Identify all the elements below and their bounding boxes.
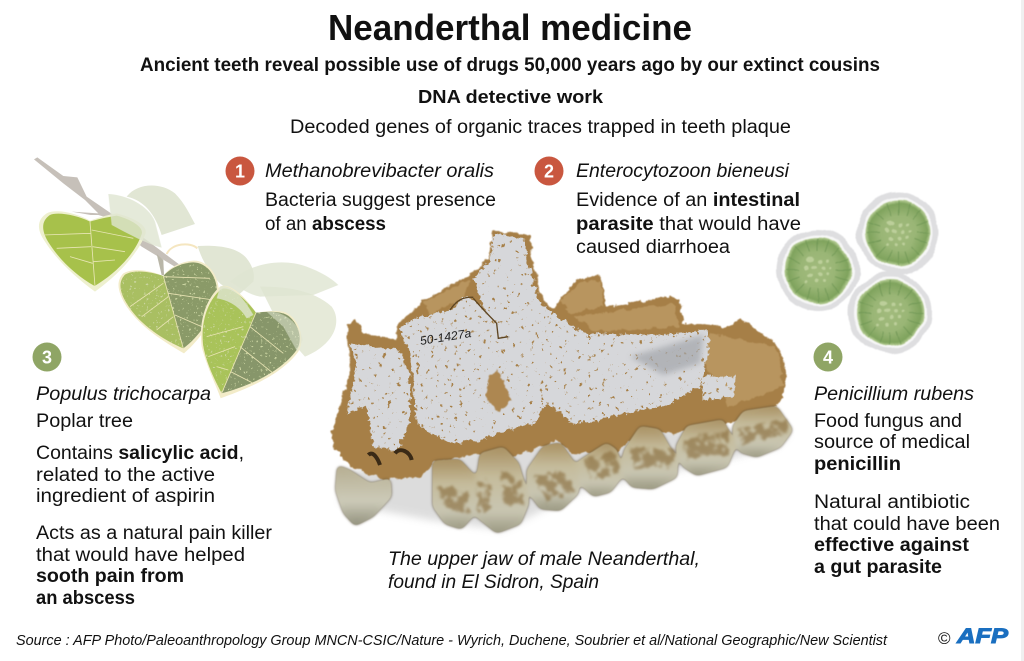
tooth staining [437, 420, 788, 513]
description: Natural antibiotic [814, 492, 970, 513]
description [36, 411, 273, 609]
description: caused diarrhoea [576, 237, 730, 258]
badge 3: 3 [42, 348, 52, 368]
description [265, 190, 496, 235]
leaf 3 [201, 286, 301, 398]
item 4: Penicillium rubens [814, 342, 1000, 578]
description: source of medical [814, 432, 970, 453]
description: related to the active [36, 465, 215, 486]
species name: Penicillium rubens [814, 384, 975, 405]
bone base [332, 230, 787, 480]
AFP credit: AFP [956, 625, 1009, 648]
leaf 2 [118, 261, 219, 353]
description: Bacteria suggest presence [265, 190, 496, 211]
ghost leaves [127, 186, 336, 357]
badge 2 [534, 156, 564, 186]
description: of an abscess [265, 214, 386, 235]
species name: Methanobrevibacter oralis [265, 161, 495, 182]
source line: Source : AFP Photo/Paleoanthropology Group MNCN-CSIC/Nature - Wyrich, Duchene, Soubrier et al/National Geographic/New Scientist [16, 632, 888, 649]
description [814, 411, 1000, 578]
darker shaded area [630, 335, 703, 375]
photo caption [388, 549, 700, 593]
section intro: Decoded genes of organic traces trapped in teeth plaque [290, 117, 791, 138]
cracks [450, 297, 508, 338]
illustration: penicillium colonies [777, 192, 939, 354]
item 2: Enterocytozoon bieneusi [534, 156, 801, 258]
bone highlights [423, 280, 783, 407]
photo caption: The upper jaw of male Neanderthal, [388, 549, 700, 570]
description: penicillin [814, 454, 901, 475]
description: an abscess [36, 588, 135, 609]
description [576, 190, 801, 258]
description: that could have been [814, 514, 1000, 535]
description: Contains salicylic acid, [36, 443, 244, 464]
badge 1: 1 [235, 162, 245, 182]
item 3: Populus trichocarpa [32, 342, 273, 609]
leaf 1 [39, 211, 146, 292]
description: that would have helped [36, 545, 245, 566]
AFP credit [938, 625, 1009, 648]
description: Evidence of an intestinal [576, 190, 800, 211]
catalogue number: 50-1427a [419, 326, 472, 348]
description: Poplar tree [36, 411, 133, 432]
title: Neanderthal medicine [328, 7, 692, 48]
illustration: poplar leaves [34, 157, 338, 398]
description: ingredient of aspirin [36, 486, 215, 507]
badge 4: 4 [823, 348, 833, 368]
item 1: Methanobrevibacter oralis [226, 156, 496, 235]
tan patch [487, 370, 512, 412]
subtitle: Ancient teeth reveal possible use of drugs 50,000 years ago by our extinct cousins [140, 55, 880, 76]
branch [34, 157, 180, 267]
badge 2: 2 [544, 162, 554, 182]
species name: Enterocytozoon bieneusi [576, 161, 790, 182]
description: parasite that would have [576, 214, 801, 235]
description: sooth pain from [36, 566, 184, 587]
badge 3 [32, 342, 62, 372]
teeth [335, 406, 793, 533]
description: a gut parasite [814, 557, 942, 578]
photo: Neanderthal upper jaw [332, 230, 793, 533]
grey matrix [347, 233, 737, 450]
AFP credit: © [938, 629, 951, 648]
section heading: DNA detective work [418, 86, 604, 107]
translucent leaves on top [108, 194, 338, 352]
description: Acts as a natural pain killer [36, 523, 273, 544]
badge 4 [814, 342, 842, 372]
badge 1 [226, 156, 254, 186]
description: Food fungus and [814, 411, 962, 432]
description: effective against [814, 535, 970, 556]
photo caption: found in El Sidron, Spain [388, 572, 599, 593]
species name: Populus trichocarpa [36, 384, 211, 405]
